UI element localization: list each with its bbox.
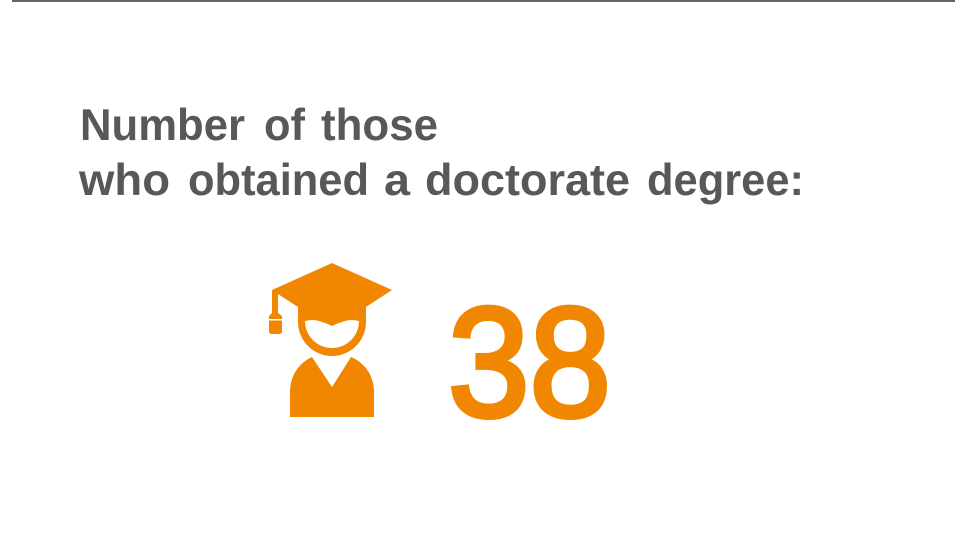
heading: of — [264, 101, 305, 150]
heading: Number — [80, 101, 245, 150]
icon: graduate with mortarboard — [268, 263, 392, 417]
heading: who — [78, 156, 170, 205]
heading: doctorate — [425, 156, 630, 205]
heading — [78, 101, 804, 205]
heading: degree: — [647, 156, 804, 205]
number 38: 38 — [448, 276, 611, 450]
gown body — [290, 357, 374, 417]
heading: a — [384, 156, 411, 205]
heading: obtained — [188, 156, 369, 205]
heading: those — [321, 101, 438, 150]
cap and head ring — [269, 263, 392, 356]
white tassel gap — [268, 319, 283, 320]
